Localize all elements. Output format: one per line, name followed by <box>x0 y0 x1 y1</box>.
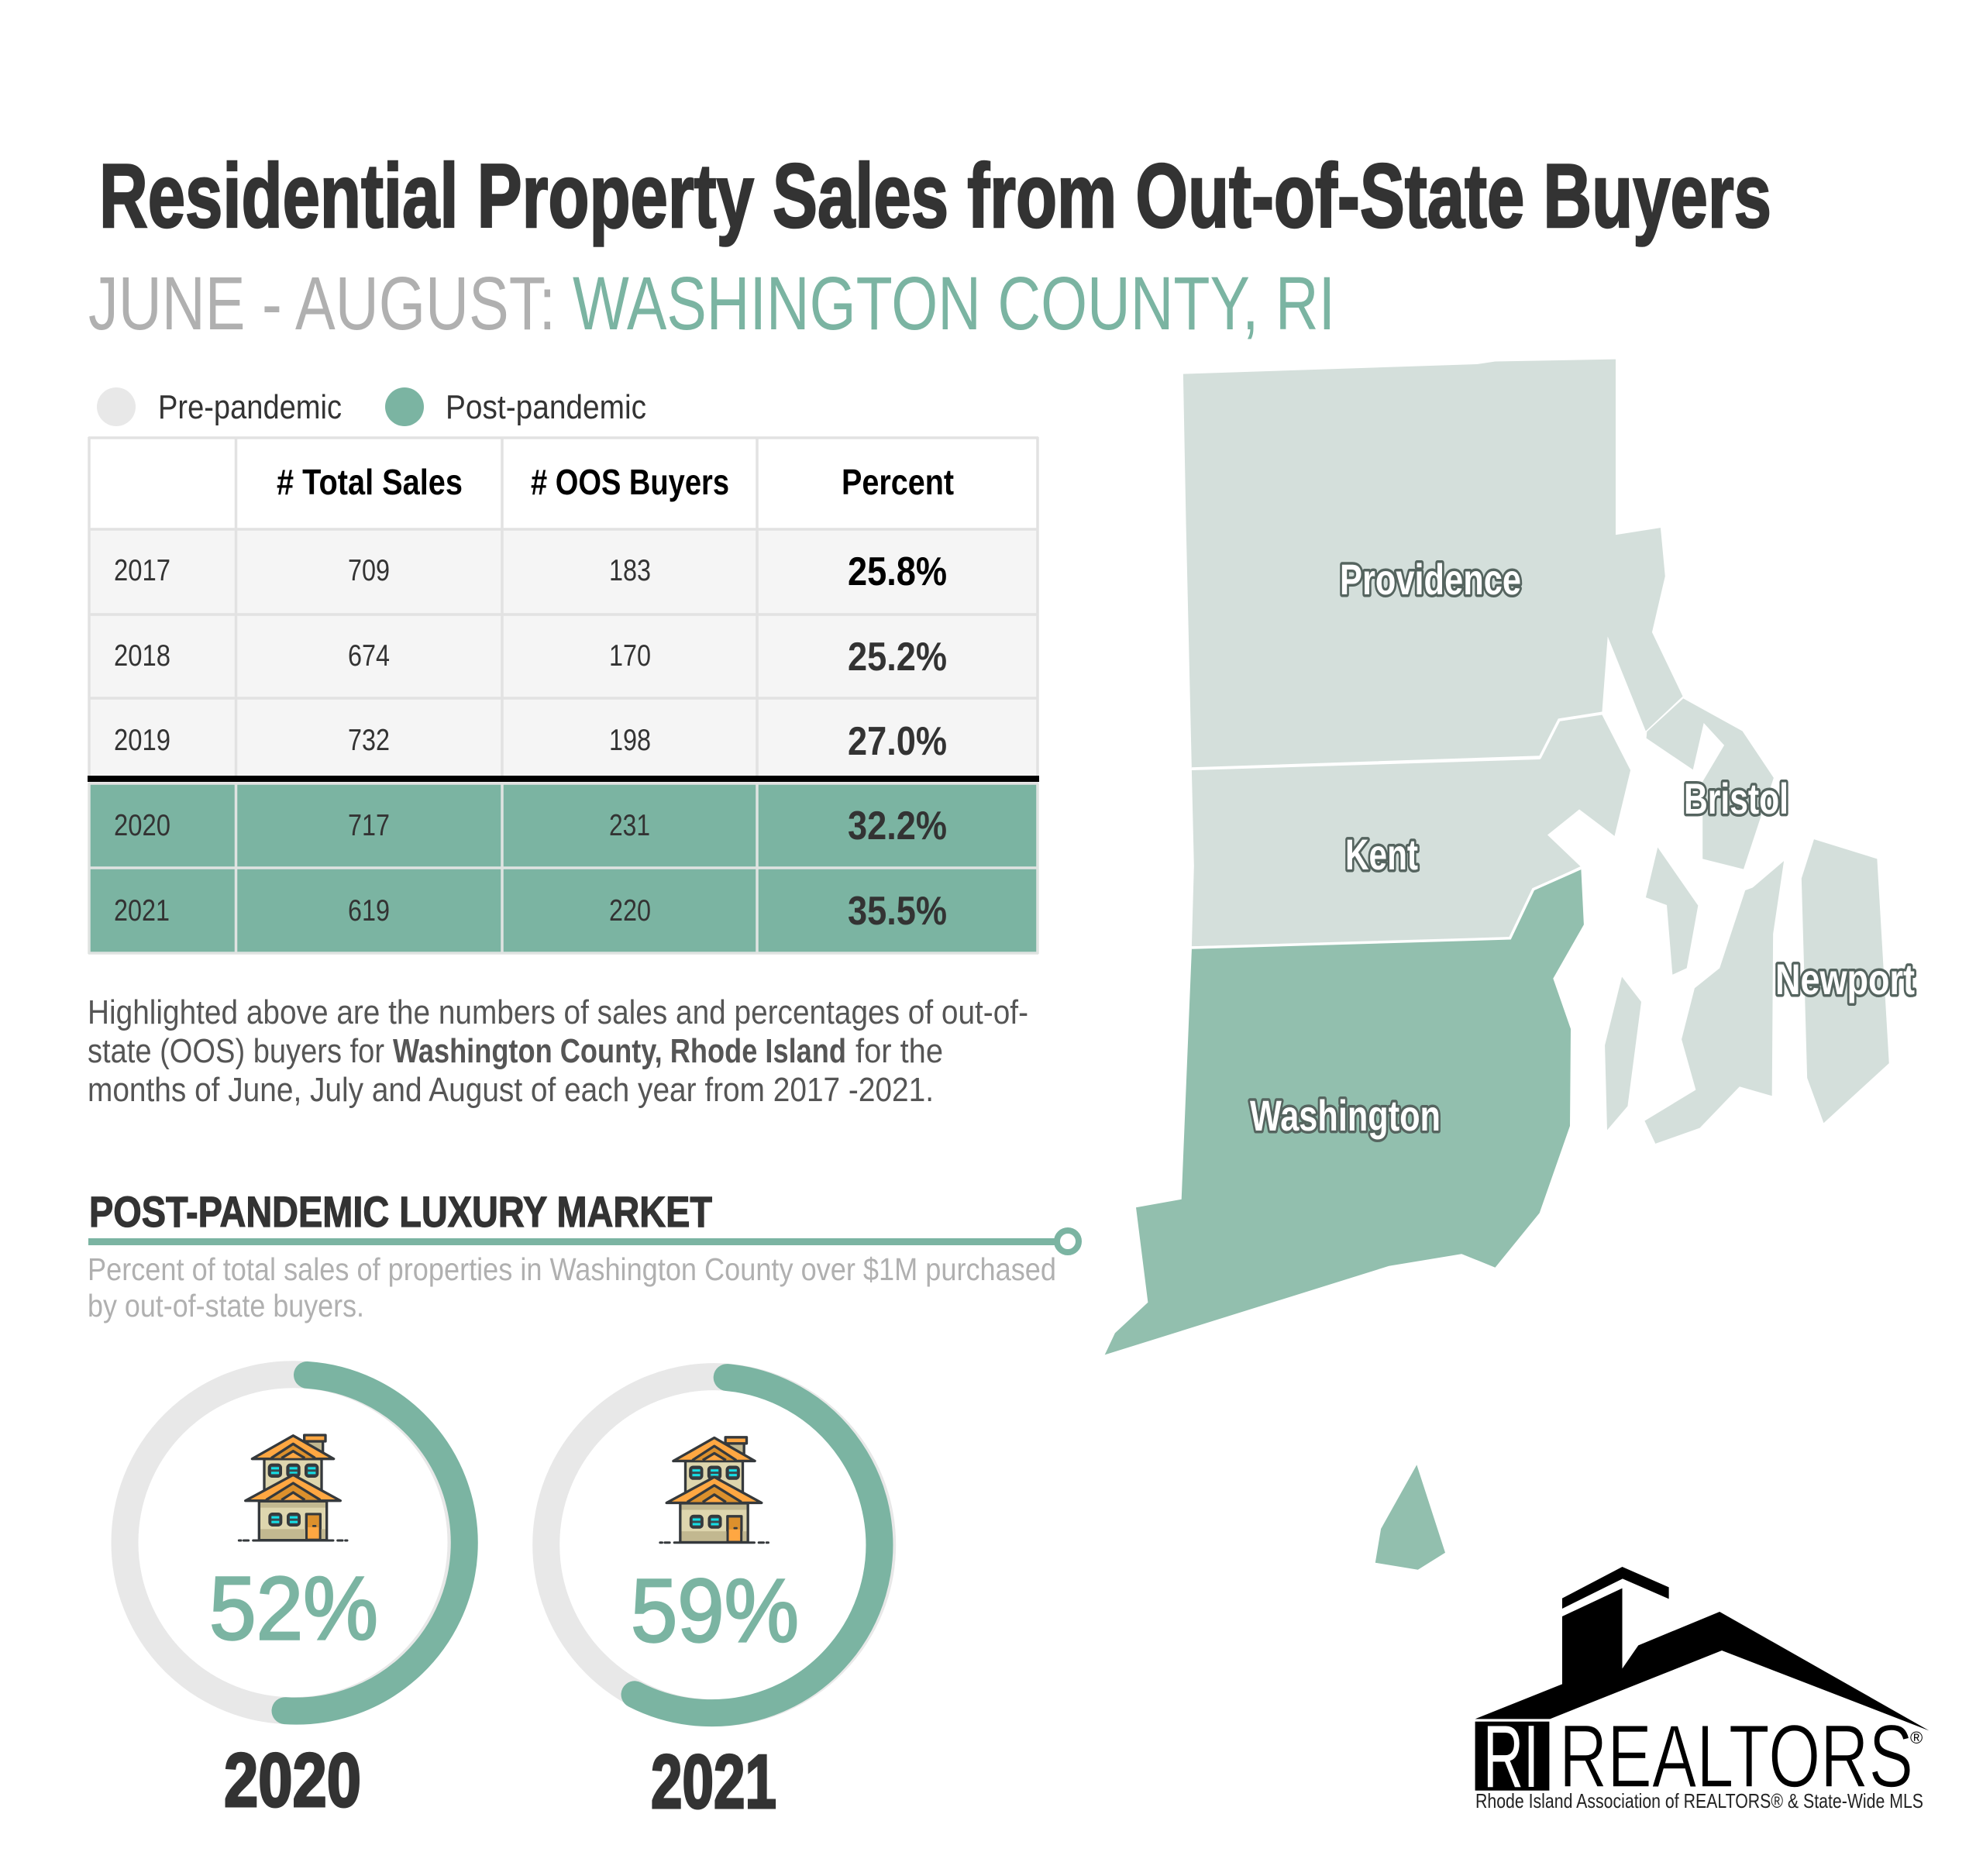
donut year 2021: 2021 <box>651 1739 776 1824</box>
donut value 59%: 59% <box>631 1561 799 1661</box>
row 2020: 231 <box>609 809 650 842</box>
row 2019: 27.0% <box>848 719 947 764</box>
row 2018: 674 <box>348 639 390 673</box>
row 2021: 2021 <box>114 894 170 928</box>
donut chart 2020 <box>125 1375 464 1823</box>
county: Kent <box>1192 714 1630 946</box>
explanatory paragraph <box>88 993 1028 1109</box>
map labels: Washington <box>1250 1091 1441 1140</box>
table header: Percent <box>842 462 954 502</box>
row 2017: 183 <box>609 554 651 587</box>
icon: house 2021 <box>660 1437 768 1543</box>
row 2018 <box>114 635 947 680</box>
row 2017: 2017 <box>114 554 170 587</box>
row 2017: 25.8% <box>848 549 947 594</box>
table header: # OOS Buyers <box>531 462 729 502</box>
map labels: Kent <box>1345 830 1418 879</box>
luxury market description: Percent of total sales of properties in Washington County over $1M purchased <box>88 1251 1056 1287</box>
luxury market description <box>88 1251 1056 1324</box>
row 2021: 220 <box>609 894 651 928</box>
row 2017: 709 <box>348 554 390 587</box>
data table <box>88 437 1039 954</box>
legend: Pre-pandemic <box>158 388 342 426</box>
county: Bristol <box>1647 698 1774 869</box>
county: Washington <box>1105 868 1584 1570</box>
donut chart 2021 <box>546 1377 883 1824</box>
row 2019: 198 <box>609 724 651 757</box>
row 2021 <box>114 889 947 934</box>
row 2021: 619 <box>348 894 390 928</box>
donut year 2020: 2020 <box>224 1737 361 1823</box>
row 2019: 2019 <box>114 724 170 757</box>
row 2018: 25.2% <box>848 635 947 680</box>
table header: # Total Sales <box>277 462 463 502</box>
logo: RI Realtors <box>1475 1567 1929 1812</box>
row 2021: 35.5% <box>848 889 947 934</box>
row 2018: 170 <box>609 639 651 673</box>
row 2020 <box>114 804 947 849</box>
row 2018: 2018 <box>114 639 170 673</box>
logo RI box: RI <box>1483 1708 1539 1806</box>
logo RI box <box>1475 1708 1549 1806</box>
donut value 52%: 52% <box>209 1558 378 1658</box>
county: Providence <box>1183 360 1683 769</box>
table header <box>277 462 954 502</box>
logo registered mark: ® <box>1910 1728 1923 1747</box>
map of Rhode Island counties <box>1105 360 1915 1570</box>
explanatory paragraph: Washington County, Rhode Island <box>393 1032 846 1070</box>
map labels: Bristol <box>1684 774 1788 823</box>
map labels: Providence <box>1340 555 1521 604</box>
row 2020: 2020 <box>114 809 170 842</box>
explanatory paragraph: Highlighted above are the numbers of sales and percentages of out-of- <box>88 993 1028 1031</box>
county: Newport <box>1605 839 1889 1144</box>
row 2019 <box>114 719 947 764</box>
heading rule with end circle <box>88 1231 1079 1252</box>
map labels: Newport <box>1775 955 1915 1003</box>
icon: house 2020 <box>239 1435 347 1540</box>
row 2020: 717 <box>348 809 390 842</box>
map labels <box>1250 555 1915 1140</box>
row 2019: 732 <box>348 724 390 757</box>
explanatory paragraph: months of June, July and August of each year from 2017 -2021. <box>88 1071 934 1109</box>
explanatory paragraph: for the <box>855 1032 943 1070</box>
logo house roof <box>1475 1567 1929 1730</box>
subtitle: WASHINGTON COUNTY, RI <box>573 261 1335 346</box>
subtitle <box>88 261 1335 346</box>
luxury market description: by out-of-state buyers. <box>88 1288 364 1324</box>
luxury market heading: POST-PANDEMIC LUXURY MARKET <box>89 1187 712 1236</box>
legend: Post-pandemic <box>446 388 646 426</box>
subtitle: JUNE - AUGUST: <box>88 261 556 346</box>
legend <box>97 387 646 426</box>
row 2020: 32.2% <box>848 804 947 849</box>
row 2017 <box>114 549 947 594</box>
explanatory paragraph: state (OOS) buyers for <box>88 1032 384 1070</box>
